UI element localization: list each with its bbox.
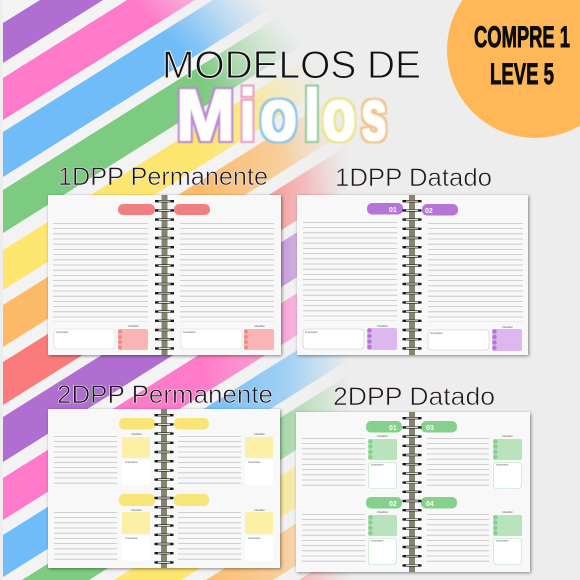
planner: 1DPP Datado: Checklist — [502, 325, 513, 329]
diagonal rainbow stripes — [3, 0, 350, 580]
planner: 2DPP Datado: 01 — [389, 425, 397, 432]
planner: 1DPP Permanente: Checklist — [128, 324, 139, 328]
planner: 2DPP Permanente: Importante — [125, 536, 138, 540]
planner: 2DPP Datado: 04 — [426, 501, 434, 508]
planner: 2DPP Datado: Importante — [496, 462, 509, 466]
planner: 2DPP Datado — [296, 412, 530, 572]
planner: 1DPP Datado — [297, 195, 528, 355]
planner: 1DPP Permanente: Importante — [56, 330, 69, 334]
title: miolos bubble letters — [176, 76, 386, 156]
planner: 1DPP Datado: Importante — [430, 331, 443, 335]
badge: compre 1 leve 5 — [447, 0, 580, 138]
planner: 2DPP Datado: Importante — [371, 462, 384, 466]
planner: 2DPP Datado: 02 — [389, 501, 397, 508]
planner: 1DPP Permanente: Importante — [183, 330, 196, 334]
planner: 2DPP Permanente — [48, 409, 280, 568]
planner: 2DPP Datado: Importante — [371, 538, 384, 542]
heading: 2DPP Datado: 2DPP Datado — [333, 383, 495, 411]
planner: 1DPP Datado: 02 — [425, 208, 433, 215]
planner: 1DPP Datado: 01 — [389, 207, 397, 214]
title: miolos bubble letters: l — [304, 76, 320, 156]
planner: 1DPP Permanente: Checklist — [254, 324, 265, 328]
planner: 2DPP Datado: Checklist — [502, 434, 513, 438]
title: miolos bubble letters: s — [362, 76, 386, 156]
planner: 2DPP Permanente: Checklist — [131, 432, 142, 436]
planner: 1DPP Permanente — [48, 195, 281, 355]
heading: 1DPP Datado: 1DPP Datado — [335, 164, 492, 192]
planner: 1DPP Datado: Checklist — [377, 324, 388, 328]
planner: 2DPP Datado: Checklist — [377, 510, 388, 514]
planner: 2DPP Permanente: Checklist — [254, 432, 265, 436]
planner: 2DPP Datado: 03 — [426, 425, 434, 432]
planner: 2DPP Permanente: Checklist — [131, 508, 142, 512]
planner: 2DPP Datado: Importante — [496, 538, 509, 542]
title: miolos bubble letters: i — [240, 76, 256, 156]
title: miolos bubble letters: M — [176, 76, 235, 156]
heading: 1DPP Permanente: 1DPP Permanente — [58, 163, 268, 191]
planner: 2DPP Datado: Checklist — [377, 434, 388, 438]
title: modelos de: MODELOS DE — [162, 44, 421, 87]
planner: 2DPP Permanente: Importante — [248, 536, 261, 540]
planner: 2DPP Permanente: Checklist — [254, 508, 265, 512]
heading: 2DPP Permanente: 2DPP Permanente — [57, 381, 273, 409]
title: miolos bubble letters: o — [322, 76, 356, 156]
planner: 2DPP Permanente: Importante — [125, 460, 138, 464]
title: miolos bubble letters: o — [260, 76, 297, 156]
planner: 2DPP Datado: Checklist — [502, 510, 513, 514]
planner: 1DPP Datado: Importante — [305, 330, 318, 334]
planner: 2DPP Permanente: Importante — [248, 460, 261, 464]
